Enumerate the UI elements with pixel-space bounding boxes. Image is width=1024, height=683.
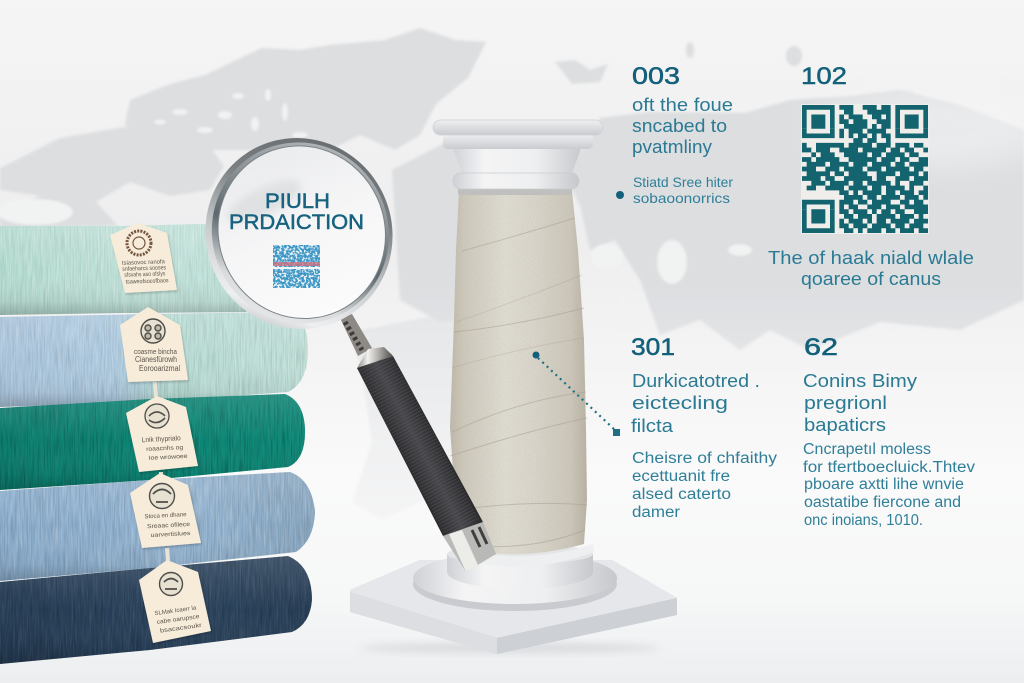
hang tag 1: tsaweofsocofbaos xyxy=(126,278,169,286)
info block 003: sobaoonorrics xyxy=(633,190,730,206)
info block 003: 003 xyxy=(632,63,680,90)
map: upper right haze xyxy=(810,90,1024,170)
spool stand on square base xyxy=(350,120,677,654)
QR code xyxy=(801,104,929,234)
info block 301: alsed caterto xyxy=(632,486,731,503)
info block 301: ecettuanit fre xyxy=(632,468,730,485)
info block 301: eictecling xyxy=(632,393,728,413)
hang tag 4: Stoca en dhane xyxy=(144,512,187,520)
hang tag 3 xyxy=(126,396,198,472)
hang tag 5: SLMak Icaerr la xyxy=(154,605,197,617)
lens heading: PRDAICTION xyxy=(229,211,364,234)
info block 62: 62 xyxy=(804,334,838,361)
info block 62: onc inoians, 1010. xyxy=(804,512,923,529)
info block 301: damer xyxy=(632,504,680,521)
info block 301: 301 xyxy=(631,334,675,361)
roll 3: teal xyxy=(0,394,305,490)
info block 301: Durkicatotred . xyxy=(632,371,760,391)
hang tag 3: Ioe wrowoee xyxy=(149,454,189,462)
hang tag 4: uarvertislues xyxy=(150,531,191,539)
info block 62: Cncrapetıl moless xyxy=(803,441,931,458)
hang tag 5: cabe oarupsce xyxy=(156,614,201,626)
lens: magnified code patch xyxy=(273,245,320,288)
info block 102 with QR code: 102 xyxy=(801,63,847,90)
lens heading: PIULH xyxy=(265,190,330,213)
roll 1: mint xyxy=(0,224,266,315)
info block 62: for tfertboecluick.Thtev xyxy=(803,459,975,476)
info block 62: bapaticrs xyxy=(804,415,886,435)
info block 003 xyxy=(616,63,733,206)
hang tag 1: snfaeharcs sooses xyxy=(122,265,166,273)
hang tag 2: Eorooarizmal xyxy=(139,364,180,373)
hang tag 3: roaacnhs og xyxy=(146,445,183,453)
hang tag 5 xyxy=(139,560,211,643)
hang tag 1 xyxy=(110,223,177,293)
info block 003: pvatmliny xyxy=(632,137,712,157)
world map backdrop xyxy=(0,28,1024,520)
roll 2: pale blue and mint xyxy=(0,312,308,407)
map: pale islands over land xyxy=(0,89,752,330)
magnifying glass xyxy=(174,107,496,572)
info block 62 xyxy=(803,334,975,529)
roll 5: navy xyxy=(0,556,312,664)
roll 4: steel blue xyxy=(0,472,315,581)
info block 301 xyxy=(631,334,777,521)
info block 003: oft the foue xyxy=(632,95,733,115)
info block 62: pregrionl xyxy=(804,393,887,413)
hang tag 1: tsiasovoc ranofa xyxy=(122,259,166,267)
hang tag 5: bsacacsoukr xyxy=(160,623,202,635)
tag connector strings xyxy=(155,382,168,561)
info block 62: pboare axtti lihe wnvie xyxy=(804,476,964,493)
callout pointer: dot and dotted leader xyxy=(532,352,620,436)
square base plate xyxy=(350,560,677,654)
handle xyxy=(340,314,496,572)
hang tag 3: Lnik thyprialo xyxy=(142,435,181,444)
thread body xyxy=(450,191,587,554)
bullet dot xyxy=(616,191,624,199)
hang tag 2 xyxy=(120,307,188,382)
panel: stacked thread rolls xyxy=(0,224,315,664)
hang tag 2: coasme bincha xyxy=(134,349,177,356)
info block 102 with QR code xyxy=(768,63,974,289)
info block 62: oastatibe fiercone and xyxy=(804,494,961,511)
info block 301: Cheisre of chfaithy xyxy=(632,450,777,467)
hang tag 4: Sreaac ofilece xyxy=(147,522,191,530)
bottom collar xyxy=(456,544,594,567)
info block 301: filcta xyxy=(631,416,674,436)
lens heading xyxy=(229,190,364,234)
top flange tiers xyxy=(433,120,603,195)
info block 102 with QR code: qoaree of canus xyxy=(801,269,941,289)
info block 102 with QR code: The of haak niald wlale xyxy=(768,248,974,268)
hang tag 2: Cianesfürowh xyxy=(135,355,177,364)
info block 003: Stiatd Sree hiter xyxy=(633,174,733,190)
info block 003: sncabed to xyxy=(632,116,727,136)
lower disc xyxy=(413,544,617,611)
hang tag 1: sfsvahs aso ofslys xyxy=(124,271,165,279)
lens ring and glass xyxy=(174,107,424,360)
hang tag 4 xyxy=(130,473,201,548)
info block 62: Conins Bimy xyxy=(803,371,917,391)
